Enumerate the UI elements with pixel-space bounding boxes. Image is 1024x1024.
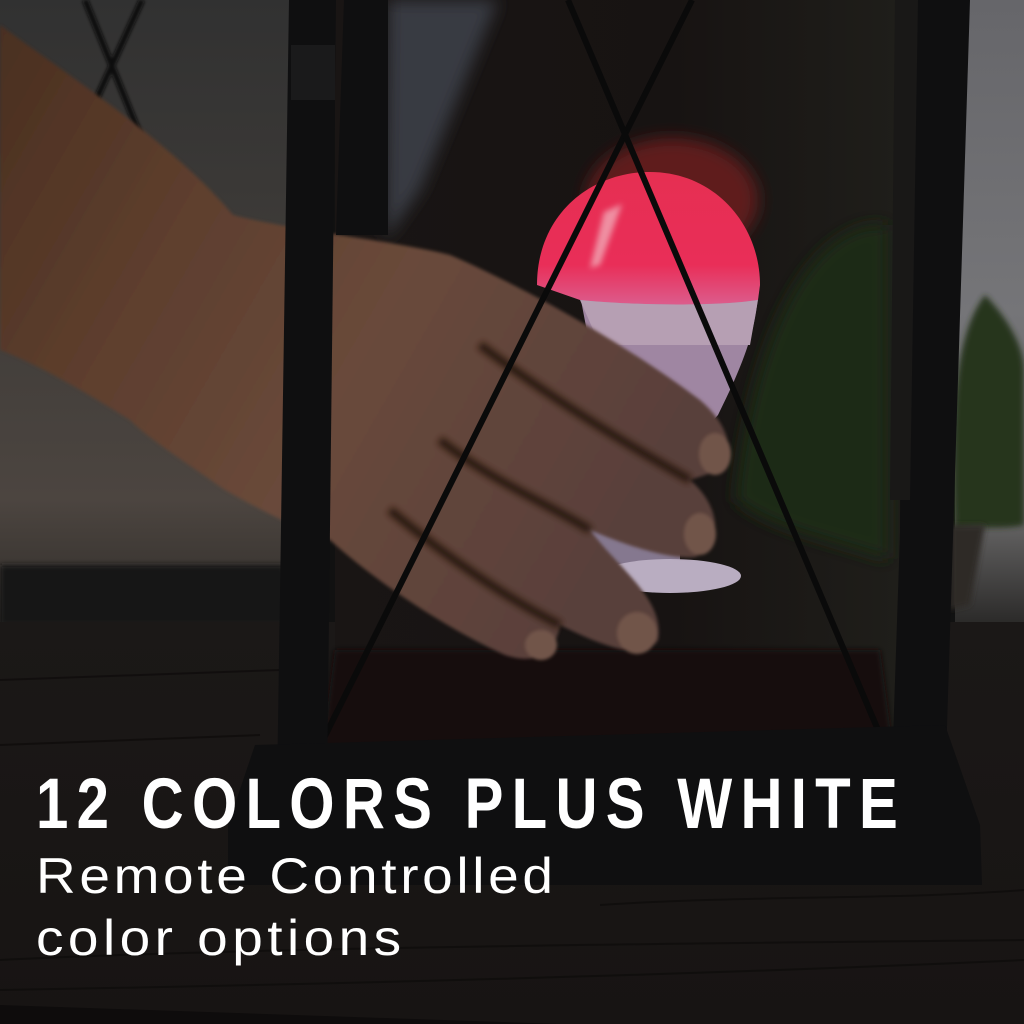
lantern base plinth bbox=[228, 725, 982, 885]
background lattice decoration bbox=[85, 0, 142, 135]
left post bbox=[277, 0, 336, 790]
left inner rail bbox=[336, 0, 388, 235]
red halo bbox=[586, 138, 758, 262]
finger shadow lines bbox=[390, 345, 690, 625]
lantern glass interior bbox=[335, 0, 900, 770]
bulb band bbox=[580, 300, 758, 345]
lantern floor inside bbox=[320, 650, 895, 765]
right post bbox=[892, 0, 970, 815]
heading: 12 COLORS PLUS WHITE bbox=[36, 763, 898, 843]
stand disc bbox=[599, 559, 741, 593]
lantern frame bbox=[228, 0, 982, 885]
hinge bbox=[291, 45, 335, 100]
table dark foreground edge bbox=[0, 1005, 560, 1024]
subheading line 2: color options bbox=[36, 910, 401, 966]
dark shelf in background bbox=[0, 565, 285, 625]
hand and arm bbox=[0, 25, 731, 660]
bulb stand bbox=[570, 470, 680, 565]
bulb lower body bbox=[580, 295, 758, 480]
right inner rail bbox=[890, 0, 918, 500]
subheading line 1: Remote Controlled bbox=[36, 848, 553, 904]
reflection on glass bbox=[385, 0, 498, 240]
lantern base lower rim bbox=[300, 752, 920, 780]
bulb highlight bbox=[590, 204, 622, 268]
pot behind lantern bbox=[950, 525, 985, 610]
bulb dome bbox=[537, 172, 760, 304]
reflected plant through glass bbox=[735, 225, 888, 560]
background wall bbox=[0, 0, 1024, 625]
bulb bbox=[537, 138, 760, 593]
lantern X wires bbox=[308, 0, 895, 770]
wooden table bbox=[0, 622, 1024, 1024]
background plant right bbox=[953, 295, 1024, 530]
fingernails bbox=[525, 433, 731, 660]
